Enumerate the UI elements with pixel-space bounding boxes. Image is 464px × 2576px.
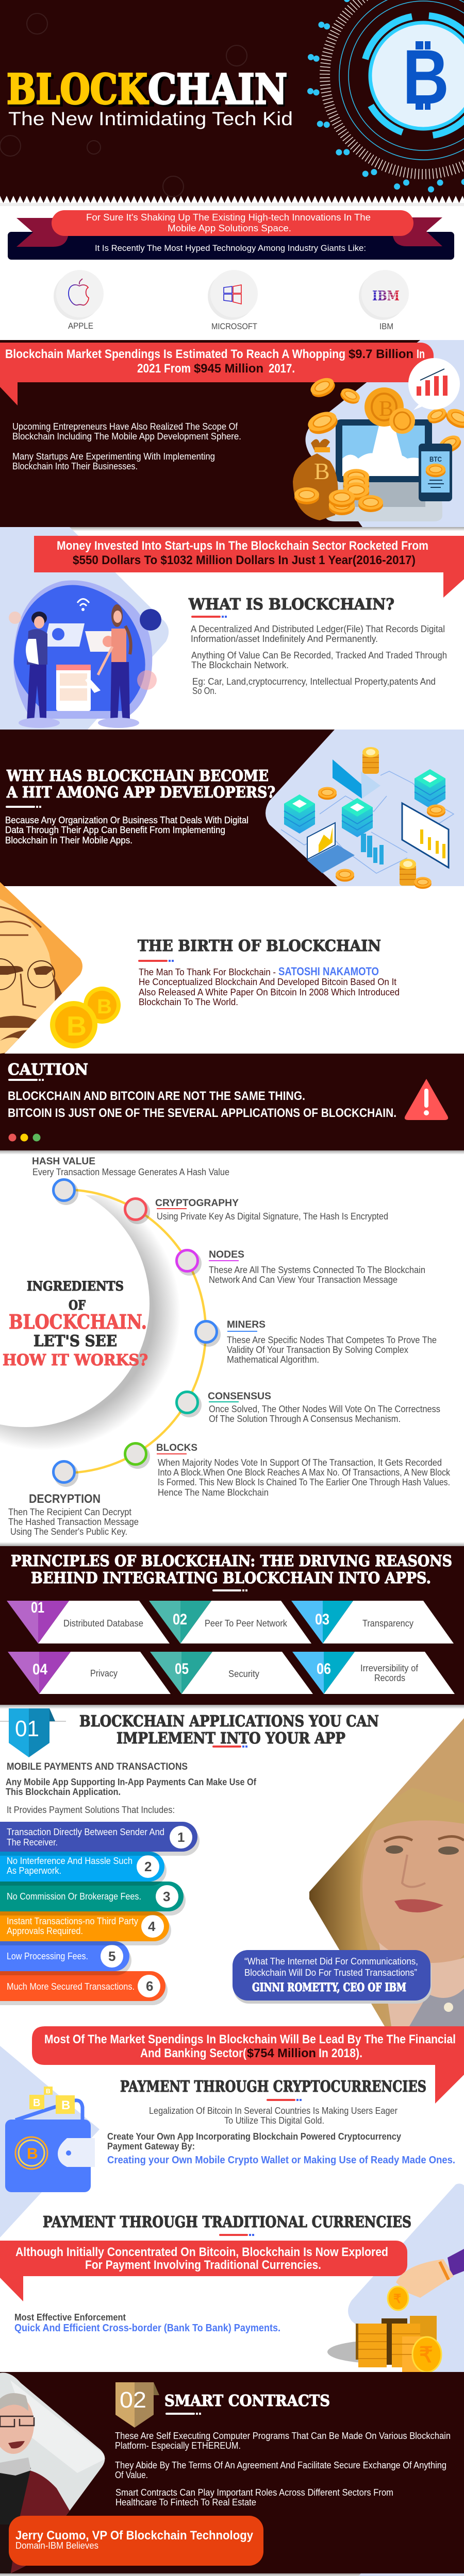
illustration: crypto laptop, coins and money bag: B [379, 397, 393, 421]
illustration: hand dropping rupee coin on stacks: ₹ [419, 2343, 433, 2367]
principle 01 [7, 1599, 170, 1643]
item 6: 6 [146, 1978, 153, 1994]
title: The New Intimidating Tech Kid [8, 108, 293, 129]
item 5: 5 [108, 1948, 115, 1964]
entrepreneurs text [12, 421, 241, 471]
principle 02: 02 [173, 1611, 187, 1628]
enforcement text: Quick And Efficient Cross-border (Bank To Bank) Payments. [14, 2323, 280, 2334]
principle 03 [291, 1601, 454, 1643]
red banner [0, 2241, 407, 2301]
heading: ingredients: LET'S SEE [34, 1332, 117, 1350]
portrait: ginni rometty [304, 1716, 464, 2030]
item: blocks: Hence The Name Blockchain [158, 1487, 269, 1498]
badge 02: 02 [120, 2387, 146, 2413]
section shadow [0, 527, 464, 531]
item 3: No Commission Or Brokerage Fees. [7, 1891, 141, 1902]
money headline [57, 539, 428, 567]
illustration: two people with devices [9, 580, 161, 728]
item: decryption: DECRYPTION [29, 1492, 101, 1506]
market headline [5, 347, 425, 376]
ribbon banner [8, 210, 454, 260]
central circle [0, 1159, 180, 1450]
divider [219, 2234, 254, 2236]
item: blocks: BLOCKS [156, 1443, 197, 1453]
principle 03: Transparency [362, 1618, 413, 1629]
divider [6, 806, 41, 808]
caution text: BLOCKCHAIN AND BITCOIN ARE NOT THE SAME THING. [8, 1089, 305, 1103]
callout: jerry cuomo [9, 2516, 263, 2566]
reason text: Blockchain In Their Mobile Apps. [5, 835, 132, 845]
title [7, 65, 293, 129]
item: miners [227, 1319, 437, 1365]
icon: microsoft [208, 270, 258, 320]
payments intro [6, 1761, 257, 1815]
principle 02: Peer To Peer Network [205, 1618, 288, 1629]
item 5: Low Processing Fees. [7, 1951, 88, 1961]
market headline: 2017. [269, 362, 295, 376]
item 4 [0, 1911, 171, 1945]
icon: ibm [359, 270, 409, 320]
illustration: crypto laptop, coins and money bag: B [314, 458, 330, 484]
item: nodes: These Are All The Systems Connected To The Blockchain [209, 1265, 425, 1275]
divider [212, 1589, 247, 1591]
heading: ingredients: INGREDIENTS [27, 1279, 124, 1294]
entrepreneurs text: Blockchain Into Their Businesses. [12, 461, 138, 471]
illustration: hand dropping rupee coin on stacks: ₹ [393, 2292, 401, 2306]
principle 06 [292, 1652, 455, 1694]
item 4: 4 [148, 1919, 156, 1934]
icon: crypto wallet: B [33, 2097, 40, 2109]
item 6 [0, 1971, 168, 2005]
divider [267, 2099, 302, 2101]
definition text: The Blockchain Network. [191, 660, 289, 670]
quote card: “What The Internet Did For Communications, [244, 1956, 418, 1967]
item: consensus: CONSENSUS [208, 1391, 271, 1402]
heading: ingredients: BLOCKCHAIN. [9, 1310, 147, 1333]
birth text: He Conceptualized Blockchain And Developed Bitcoin Based On It [139, 977, 396, 987]
panel: blockchain applications - mobile payments [0, 1708, 464, 2030]
principle 01: Distributed Database [63, 1618, 143, 1629]
heading [79, 1713, 379, 1748]
payments intro: It Provides Payment Solutions That Includes: [7, 1805, 175, 1815]
smart contracts text: Platform- Especially ETHEREUM. [115, 2441, 241, 2451]
market headline: Blockchain Market Spendings Is Estimated To Reach A Whopping [5, 347, 345, 361]
icon: apple [54, 270, 104, 320]
birth text: Blockchain To The World. [139, 997, 238, 1007]
item: consensus [208, 1391, 440, 1424]
market headline: $945 Million [194, 362, 263, 376]
portrait: satoshi nakamoto [0, 882, 88, 1060]
item 5 [0, 1941, 131, 1975]
definition text: A Decentralized And Distributed Ledger(File) That Records Digital [191, 624, 445, 634]
title: BLOCKCHAIN [8, 67, 289, 115]
item: hash value: Every Transaction Message Generates A Hash Value [32, 1167, 229, 1177]
panel: principles of blockchain [0, 1542, 464, 1705]
item 1: 1 [177, 1829, 185, 1845]
heading: WHAT IS BLOCKCHAIN? [188, 596, 394, 614]
definition text: So On. [192, 686, 217, 696]
heading: WHY HAS BLOCKCHAIN BECOME [6, 767, 269, 785]
entrepreneurs text: Upcoming Entrepreneurs Have Also Realized The Scope Of [12, 421, 238, 432]
divider [212, 1745, 247, 1748]
definition text [191, 624, 447, 696]
icon: warning triangle [405, 1079, 448, 1120]
crypto text: Payment Gateway By: [107, 2141, 195, 2151]
enforcement text [14, 2312, 280, 2334]
item: nodes: Network And Can View Your Transaction Message [209, 1275, 397, 1285]
divider [165, 2413, 201, 2415]
item 2: No Interference And Hassle Such [7, 1856, 132, 1866]
smart contracts text: Healthcare To Fintech To Real Estate [115, 2497, 256, 2507]
item: consensus: Of The Solution Through A Consensus Mechanism. [209, 1414, 401, 1424]
heading: IMPLEMENT INTO YOUR APP [117, 1730, 345, 1748]
item 3: 3 [163, 1889, 170, 1904]
reason text: Because Any Organization Or Business That Deals With Digital [5, 815, 248, 825]
crypto text [107, 2106, 455, 2166]
financial sector headline [44, 2032, 456, 2060]
item 2: 2 [144, 1859, 152, 1874]
title: CHAIN [148, 65, 287, 113]
heading: BEHIND INTEGRATING BLOCKCHAIN INTO APPS. [31, 1569, 431, 1587]
item: hash value: HASH VALUE [32, 1156, 95, 1167]
financial sector headline: $754 Million [247, 2046, 316, 2060]
item: nodes: NODES [209, 1249, 244, 1260]
smart contracts text: Smart Contracts Can Play Important Roles Across Different Sectors From [115, 2487, 393, 2498]
icon: crypto wallet: B [27, 2145, 38, 2162]
panel: caution [0, 1054, 464, 1150]
principle 06: Irreversibility of [360, 1663, 419, 1673]
principle 03: 03 [315, 1611, 329, 1628]
item: decryption: Using The Sender's Public Key. [10, 1527, 127, 1537]
icon: bitcoin radial emblem: B [403, 33, 449, 120]
item: cryptography [155, 1198, 388, 1222]
panel: payment through traditional currencies [0, 2183, 464, 2372]
nodes [54, 1180, 221, 1487]
payments intro: MOBILE PAYMENTS AND TRANSACTIONS [7, 1761, 188, 1772]
caution text [8, 1089, 396, 1120]
label: apple: APPLE [68, 321, 93, 331]
badge 02 [115, 2382, 159, 2428]
illustration: crypto laptop, coins and money bag: BTC [429, 455, 442, 463]
panel: networking and iot [0, 2573, 464, 2576]
chain arc [64, 1190, 206, 1473]
principle 05: 05 [175, 1660, 189, 1677]
principle 01: 01 [31, 1599, 44, 1616]
panel: what is blockchain [0, 527, 464, 730]
heading: ingredients: HOW IT WORKS? [3, 1351, 148, 1369]
callout: jerry cuomo: Jerry Cuomo, VP Of Blockchain Technology [15, 2529, 254, 2543]
principle 04: Privacy [90, 1668, 118, 1679]
illustration: blockchain network [281, 747, 454, 889]
item: decryption [8, 1492, 139, 1537]
heading: SMART CONTRACTS [164, 2392, 330, 2410]
callout: jerry cuomo: Domain-IBM Believes [15, 2540, 98, 2551]
panel: ingredients of blockchain [0, 1156, 451, 1537]
label: microsoft: MICROSOFT [211, 321, 257, 331]
label: ibm: IBM [379, 321, 393, 331]
icon: ibm: IBM [372, 289, 400, 304]
heading: CAUTION [8, 1061, 88, 1079]
icon: gold coins: B [97, 995, 112, 1018]
panel: why a hit among developers [0, 730, 464, 889]
crypto text: Legalization Of Bitcoin In Several Countries Is Making Users Eager [149, 2106, 397, 2116]
item: miners: Validity Of Your Transaction By Solving Complex [227, 1345, 408, 1355]
crypto text: To Utilize This Digital Gold. [224, 2115, 324, 2126]
principle 06: Records [374, 1673, 405, 1683]
entrepreneurs text: Blockchain Including The Mobile App Development Sphere. [12, 431, 241, 442]
birth text: The Man To Thank For Blockchain - [139, 967, 276, 977]
birth text: Also Released A White Paper On Bitcoin In 2008 Which Introduced [139, 987, 400, 997]
reason text: Data Through Their App Can Benefit From Implementing [5, 825, 225, 835]
birth text: SATOSHI NAKAMOTO [278, 965, 379, 978]
panel: payment through cryptocurrencies [0, 2026, 464, 2238]
principle 04 [8, 1652, 171, 1694]
caution text: BITCOIN IS JUST ONE OF THE SEVERAL APPLICATIONS OF BLOCKCHAIN. [8, 1106, 396, 1120]
icon: bitcoin radial emblem [309, 0, 464, 190]
icon: gold coins: B [67, 1011, 87, 1042]
payments intro: This Blockchain Application. [6, 1787, 121, 1797]
financial sector headline: In 2018). [319, 2046, 362, 2060]
panel: birth of blockchain [0, 882, 400, 1060]
smart contracts text [115, 2431, 451, 2507]
payments intro: Any Mobile App Supporting In-App Payments Can Make Use Of [6, 1777, 257, 1787]
item: decryption: Then The Recipient Can Decrypt [8, 1507, 131, 1517]
birth text [139, 965, 400, 1007]
red banner: For Payment Involving Traditional Currencies. [85, 2258, 321, 2272]
principle 06: 06 [317, 1660, 331, 1677]
divider [191, 616, 227, 618]
badge 01: 01 [15, 1716, 39, 1741]
heading [11, 1552, 452, 1587]
item: cryptography: CRYPTOGRAPHY [155, 1198, 239, 1209]
item: cryptography: Using Private Key As Digital Signature, The Hash Is Encrypted [157, 1211, 388, 1222]
definition text: Anything Of Value Can Be Recorded, Tracked And Traded Through [191, 650, 447, 660]
item 4: Approvals Required. [7, 1926, 83, 1936]
principle 05 [150, 1652, 313, 1694]
item 3 [0, 1882, 186, 1916]
icon: crypto wallet [5, 2087, 95, 2192]
market headline: 2021 From [137, 362, 191, 376]
item 2 [0, 1852, 167, 1886]
item: miners: Mathematical Algorithm. [227, 1354, 319, 1365]
item: nodes [209, 1249, 425, 1285]
financial sector headline: And Banking Sector( [140, 2046, 246, 2060]
hero panel [0, 0, 464, 206]
item 1: The Receiver. [7, 1837, 58, 1848]
item 2: As Paperwork. [7, 1866, 61, 1876]
divider [138, 960, 174, 962]
item: consensus: Once Solved, The Other Nodes Will Vote On The Correctness [209, 1404, 440, 1414]
smart contracts text: Of Value. [115, 2470, 148, 2480]
red banner: Although Initially Concentrated On Bitcoin, Blockchain Is Now Explored [15, 2245, 388, 2259]
panel: smart contracts [0, 2370, 464, 2576]
dots [8, 1133, 40, 1142]
market headline: In [417, 347, 425, 361]
definition text: Eg: Car, Land,cryptocurrency, Intellectual Property,patents And [192, 676, 436, 687]
icon: gold coins [50, 987, 121, 1048]
quote card [233, 1950, 432, 2004]
illustration: hand dropping rupee coin on stacks [327, 2249, 464, 2372]
money headline: $550 Dollars To $1032 Million Dollars In Just 1 Year(2016-2017) [73, 553, 416, 567]
entrepreneurs text: Many Startups Are Experimenting With Implementing [12, 451, 215, 462]
item 1 [0, 1822, 200, 1856]
heading: BLOCKCHAIN APPLICATIONS YOU CAN [79, 1713, 379, 1731]
title: BLOCK [7, 65, 148, 113]
portrait: jerry cuomo [0, 2370, 108, 2576]
item 1: Transaction Directly Between Sender And [7, 1827, 164, 1837]
quote card: GINNI ROMETTY, CEO OF IBM [252, 1981, 406, 1994]
industry logos [54, 270, 409, 331]
item: blocks: When Majority Nodes Vote In Support Of The Transaction, It Gets Recorded [158, 1458, 442, 1468]
item: blocks [156, 1443, 451, 1498]
item 6: Much More Secured Transactions. [7, 1981, 135, 1992]
heading [6, 767, 275, 802]
heading: ingredients: OF [69, 1298, 86, 1313]
item 4: Instant Transactions-no Third Party [7, 1916, 138, 1926]
ribbon banner: Mobile App Solutions Space. [168, 223, 291, 233]
quote card: Blockchain Will Do For Trusted Transactions” [244, 1968, 417, 1978]
ribbon banner: For Sure It's Shaking Up The Existing High-tech Innovations In The [86, 212, 371, 223]
heading: ingredients [3, 1279, 148, 1369]
heading: THE BIRTH OF BLOCKCHAIN [138, 937, 381, 955]
illustration: crypto laptop, coins and money bag [293, 358, 464, 521]
crypto text: Create Your Own App Incorporating Blockchain Powered Cryptocurrency [107, 2131, 401, 2142]
icon: crypto wallet: B [61, 2098, 70, 2112]
item: hash value [32, 1156, 229, 1177]
principle 02 [149, 1601, 311, 1643]
divider [8, 1079, 44, 1081]
principle 05: Security [228, 1669, 259, 1679]
definition text: Information/asset Indefinitely And Permanently. [191, 634, 378, 644]
principle 04: 04 [32, 1661, 47, 1678]
badge 01 [0, 1708, 66, 1757]
enforcement text: Most Effective Enforcement [14, 2312, 126, 2323]
icon: crypto wallet: B [46, 2088, 51, 2095]
item: miners: MINERS [227, 1319, 266, 1330]
market headline: $9.7 Billion [349, 347, 413, 361]
heading: A HIT AMONG APP DEVELOPERS? [6, 784, 275, 802]
ribbon banner: It Is Recently The Most Hyped Technology Among Industry Giants Like: [95, 243, 366, 253]
payment list [0, 1822, 200, 2005]
item: decryption: The Hashed Transaction Message [8, 1517, 139, 1527]
item: miners: These Are Specific Nodes That Competes To Prove The [227, 1335, 437, 1345]
reason text [5, 815, 248, 845]
panel: market spending [0, 340, 464, 527]
